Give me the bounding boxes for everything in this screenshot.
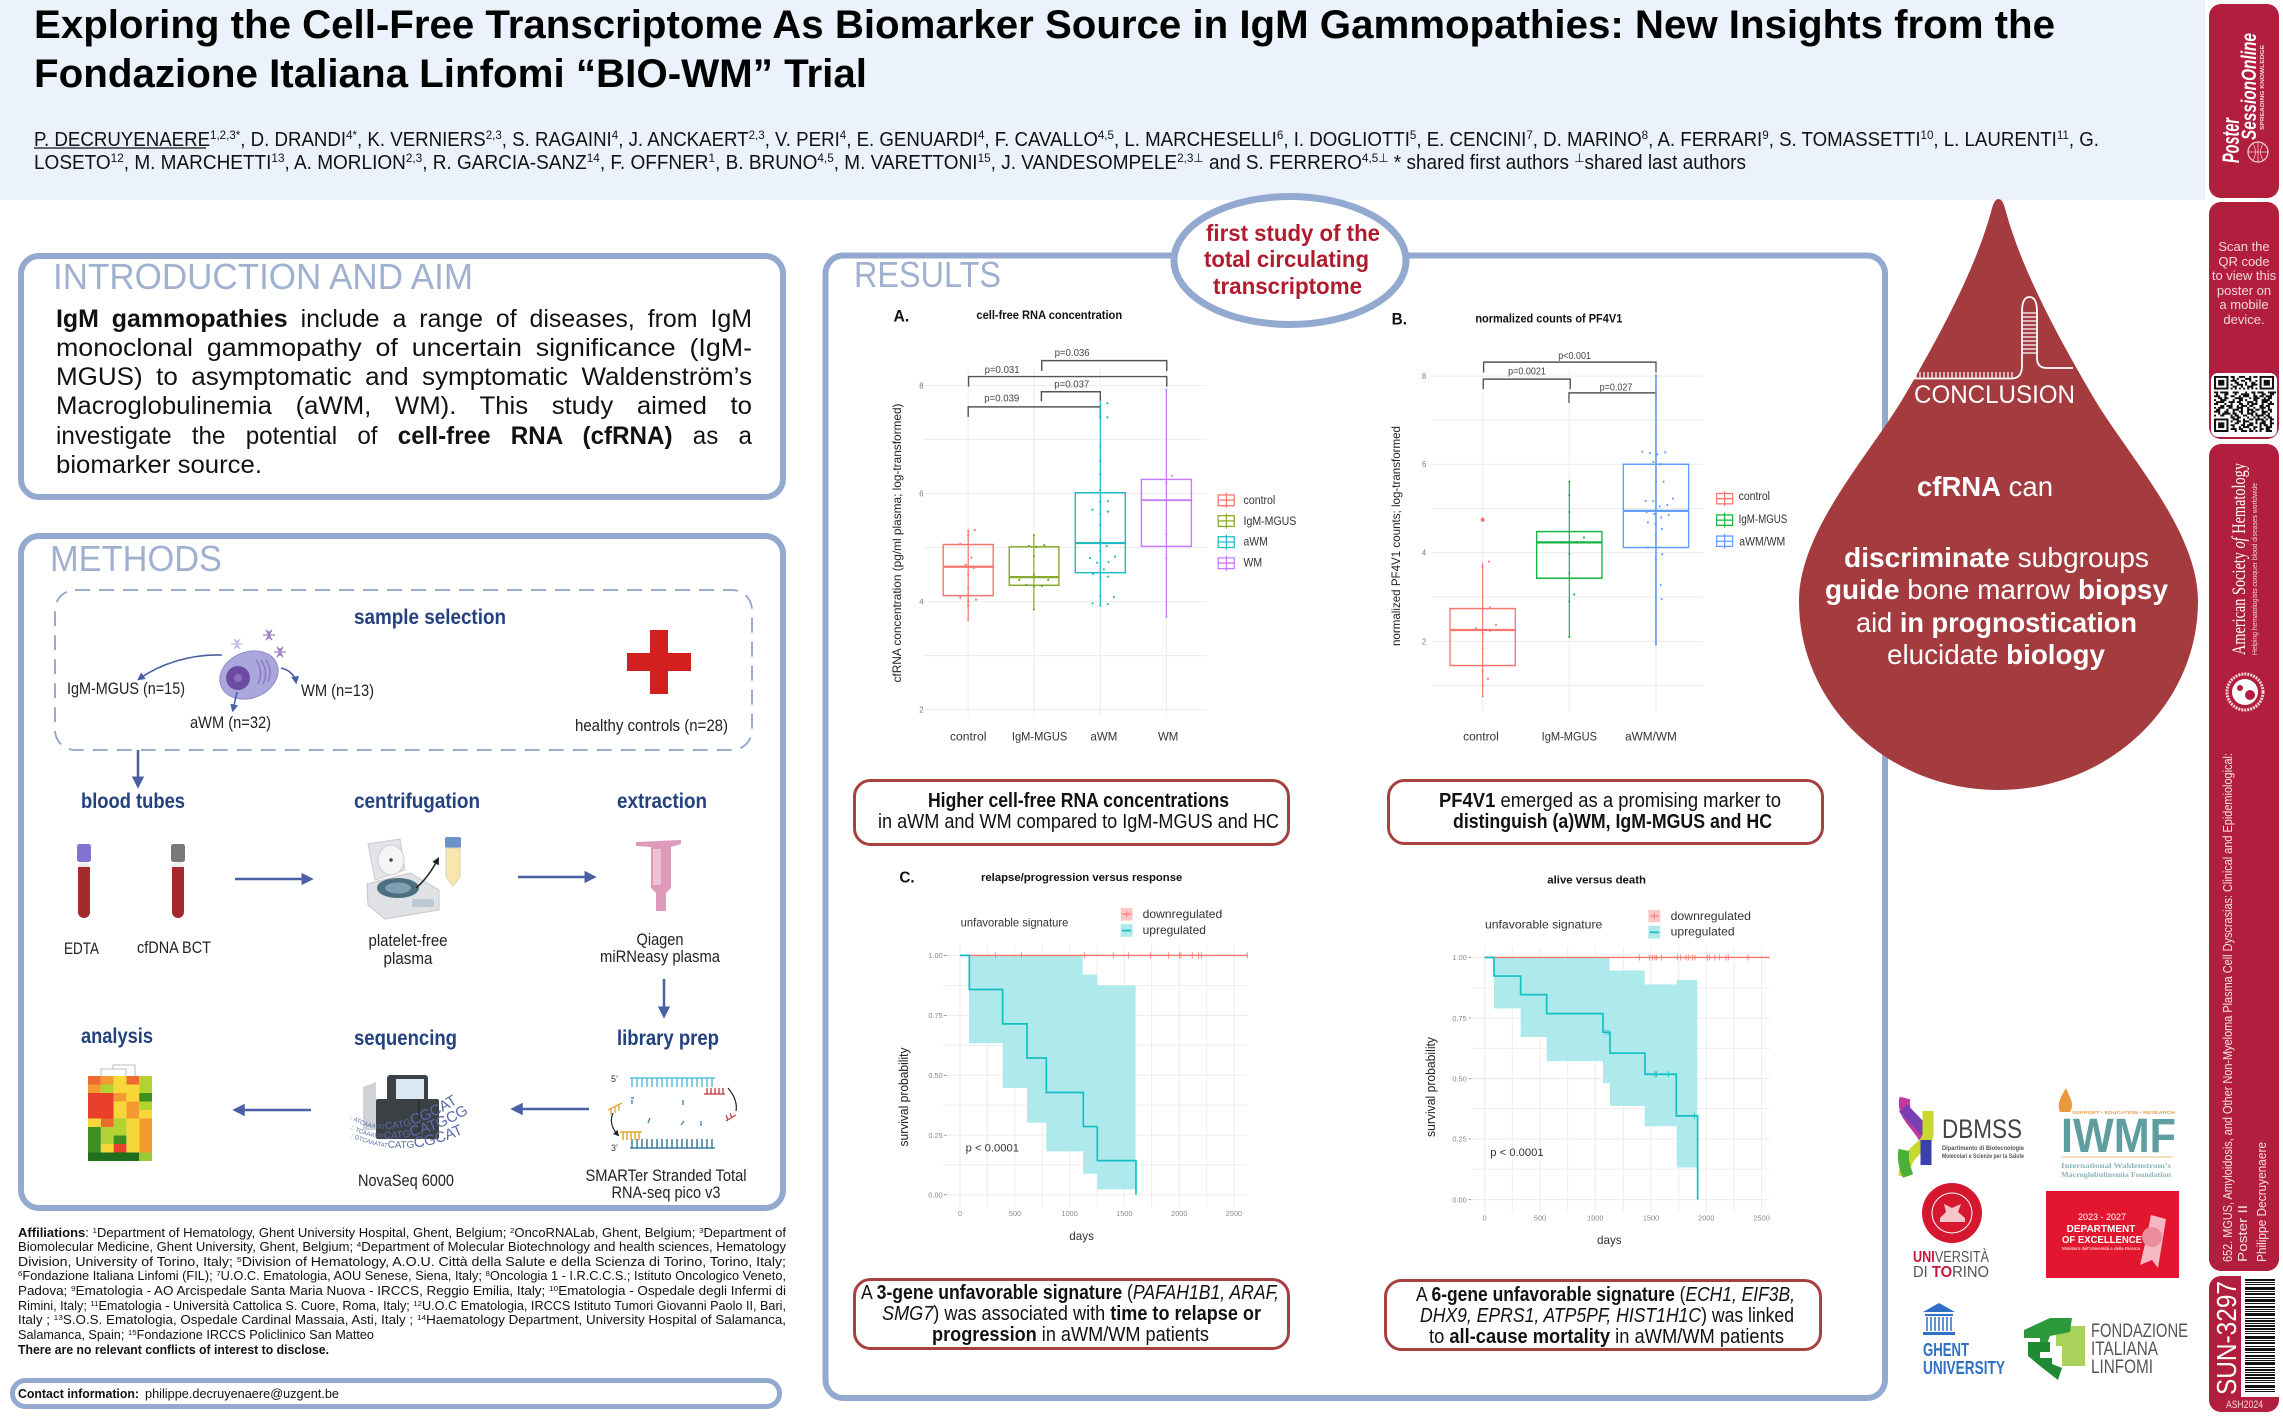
caption D: to all-cause mortality in aWM/WM patients bbox=[1429, 1326, 1784, 1348]
step: analysis heatmap bbox=[81, 1025, 153, 1161]
chart C: relapse/progression versus response: 0.25 bbox=[928, 1131, 943, 1140]
panel: conclusion drop bbox=[1799, 199, 2198, 790]
icon: RNA hairpin bbox=[1914, 297, 2073, 378]
sidebar: abstract number and barcode: SUN-3297 bbox=[2211, 1281, 2242, 1395]
affiliations: Padova; 9Ematologia - AO Arcispedale Santa Maria Nuova - IRCCS, Reggio Emilia, Italy; 10Ematologia - Ospedale degli Infermi di bbox=[18, 1284, 786, 1298]
arrow: extraction to library prep bbox=[663, 979, 665, 1015]
chart A: cell-free RNA concentration: WM bbox=[1244, 556, 1262, 570]
panel: results bbox=[826, 254, 1885, 1398]
arrow: centrifugation to extraction bbox=[518, 876, 593, 878]
chart C: relapse/progression versus response: unfavorable signature bbox=[961, 915, 1069, 930]
chart A: cell-free RNA concentration: aWM bbox=[1244, 534, 1268, 549]
logo: DBMSS: Molecolari e Scienze per la Salute bbox=[1942, 1153, 2024, 1160]
chart C: relapse/progression versus response: 1.00 bbox=[928, 951, 943, 960]
legend B bbox=[1717, 491, 1733, 549]
caption D: DHX9, EPRS1, ATP5PF, HIST1H1C) was linked bbox=[1420, 1305, 1794, 1327]
step: library prep: library prep bbox=[617, 1027, 719, 1050]
logo: department of excellence: OF EXCELLENCE bbox=[2062, 1235, 2142, 1246]
logo: Fondazione Italiana Linfomi: ITALIANA bbox=[2091, 1339, 2158, 1360]
chart C: relapse/progression versus response: p < 0.0001 bbox=[966, 1142, 1019, 1154]
contact information: Contact information: bbox=[18, 1387, 139, 1401]
step: extraction: miRNeasy plasma bbox=[600, 948, 721, 966]
arrows: cell to subgroups bbox=[139, 655, 296, 710]
logo: IWMF bbox=[2059, 1088, 2176, 1179]
chart B: normalized counts of PF4V1: 4 bbox=[1422, 548, 1427, 558]
chart D: alive versus death: 500 bbox=[1534, 1213, 1546, 1223]
chart A: cell-free RNA concentration: p=0.031 bbox=[985, 365, 1020, 376]
sample selection box: aWM (n=32) bbox=[190, 714, 271, 732]
step: extraction bbox=[600, 790, 721, 966]
intro text: monoclonal gammopathy of uncertain significance (IgM- bbox=[56, 334, 752, 362]
caption D: A 6-gene unfavorable signature (ECH1, EIF3B, bbox=[1416, 1284, 1795, 1306]
logo: Ghent University: UNIVERSITY bbox=[1923, 1358, 2005, 1378]
panel: methods bbox=[18, 533, 786, 1211]
logo: department of excellence: 2023 - 2027 bbox=[2078, 1212, 2126, 1222]
chart A: cell-free RNA concentration: 6 bbox=[919, 489, 924, 498]
chart D: alive versus death: survival probability bbox=[1424, 1036, 1438, 1137]
intro text: Macroglobulinemia (aWM, WM). This study aimed to bbox=[56, 392, 752, 420]
logo: DBMSS: DBMSS bbox=[1942, 1114, 2022, 1144]
chart C: relapse/progression versus response: relapse/progression versus response bbox=[981, 872, 1182, 884]
affiliations: Salamanca, Spain; 15Fondazione IRCCS Policlinico San Matteo bbox=[18, 1328, 374, 1342]
chart C: relapse/progression versus response: C. bbox=[899, 870, 915, 887]
sample selection box: WM (n=13) bbox=[301, 682, 374, 700]
chart A: cell-free RNA concentration: p=0.037 bbox=[1054, 380, 1089, 391]
contact information bbox=[12, 1380, 780, 1406]
chart B: normalized counts of PF4V1: control bbox=[1739, 490, 1770, 503]
intro text bbox=[56, 305, 752, 479]
chart B: normalized counts of PF4V1: normalized counts of PF4V1 bbox=[1475, 312, 1623, 326]
legend D: upregulated bbox=[1671, 925, 1735, 939]
icon: ASH seal bbox=[2227, 674, 2263, 710]
legend C: upregulated bbox=[1143, 923, 1206, 937]
arrow: sequencing to analysis bbox=[236, 1109, 311, 1111]
authors: LOSETO12, M. MARCHETTI13, A. MORLION2,3, R. GARCIA-SANZ14, F. OFFNER1, B. BRUNO4,5, M. VARETTONI15, J. VANDESOMPELE2,3⊥ and S. FERRERO4,5⊥ * shared first authors ⊥shared last authors bbox=[34, 151, 1746, 174]
chart B: normalized counts of PF4V1: aWM/WM bbox=[1625, 730, 1677, 744]
step: centrifugation: platelet-free bbox=[368, 932, 448, 950]
chart C: relapse/progression versus response: 0.75 bbox=[928, 1011, 943, 1020]
intro text: investigate the potential of cell-free RNA (cfRNA) as a bbox=[56, 422, 752, 450]
chart B: normalized counts of PF4V1: aWM/WM bbox=[1739, 535, 1785, 549]
step: library prep: 5’ bbox=[611, 1074, 618, 1084]
intro text: IgM gammopathies include a range of diseases, from IgM bbox=[56, 305, 752, 333]
callout: first study of the total circulating transcriptome bbox=[1174, 196, 1406, 324]
affiliations bbox=[18, 1226, 787, 1357]
logo: Università di Torino: DI TORINO bbox=[1913, 1264, 1989, 1281]
step: sequencing: NovaSeq 6000 bbox=[358, 1172, 454, 1190]
chart A: cell-free RNA concentration: control bbox=[950, 729, 986, 744]
chart C: relapse/progression versus response: 1500 bbox=[1116, 1209, 1132, 1218]
legend C bbox=[1121, 907, 1222, 937]
step: sequencing: : GTCAAATATCATGCGCAT bbox=[352, 1124, 460, 1148]
chart C: relapse/progression versus response: 0.50 bbox=[928, 1071, 943, 1080]
step: blood tubes: cfDNA BCT bbox=[137, 939, 211, 957]
step: analysis heatmap: analysis bbox=[81, 1025, 153, 1048]
heading: results: RESULTS bbox=[854, 254, 1001, 295]
chart C: relapse/progression versus response bbox=[897, 870, 1248, 1243]
header band bbox=[0, 0, 2205, 200]
chart A: cell-free RNA concentration: 8 bbox=[919, 381, 924, 390]
logo: DBMSS: Dipartimento di Biotecnologie bbox=[1942, 1145, 2024, 1152]
chart D: alive versus death: 1.00 bbox=[1452, 953, 1467, 962]
chart C: relapse/progression versus response: 1000 bbox=[1062, 1209, 1078, 1218]
title bbox=[34, 3, 2055, 96]
logo: department of excellence bbox=[2046, 1191, 2179, 1278]
chart D: alive versus death: unfavorable signature bbox=[1485, 917, 1603, 932]
chart D: alive versus death: days bbox=[1597, 1233, 1622, 1247]
title: Fondazione Italiana Linfomi “BIO-WM” Trial bbox=[34, 52, 867, 96]
chart D: alive versus death: 0.00 bbox=[1452, 1195, 1467, 1204]
chart B: normalized counts of PF4V1: p=0.027 bbox=[1600, 382, 1632, 394]
sample selection box: IgM-MGUS (n=15) bbox=[67, 680, 185, 698]
chart B: normalized counts of PF4V1: p=0.0021 bbox=[1508, 366, 1546, 378]
chart A: cell-free RNA concentration: WM bbox=[1158, 729, 1178, 744]
chart B: normalized counts of PF4V1: B. bbox=[1392, 310, 1407, 329]
intro text: MGUS) to asymptomatic and symptomatic Waldenström’s bbox=[56, 363, 752, 391]
legend C: downregulated bbox=[1143, 907, 1222, 921]
chart D: alive versus death: 0.75 bbox=[1452, 1014, 1467, 1023]
caption C bbox=[854, 1280, 1288, 1348]
caption A: in aWM and WM compared to IgM-MGUS and HC bbox=[878, 811, 1279, 833]
chart D: alive versus death: 0.50 bbox=[1452, 1074, 1467, 1083]
affiliations: Affiliations: 1Department of Hematology, Ghent University Hospital, Ghent, Belgium; 2OncoRNALab, Ghent, Belgium; 3Department of bbox=[18, 1226, 787, 1240]
step: centrifugation: centrifugation bbox=[354, 790, 480, 813]
logo: Fondazione Italiana Linfomi: FONDAZIONE bbox=[2091, 1321, 2188, 1342]
legend D: downregulated bbox=[1671, 909, 1751, 923]
chart D: alive versus death: 1000 bbox=[1587, 1213, 1603, 1223]
chart A: cell-free RNA concentration: control bbox=[1244, 493, 1275, 507]
sample selection box: healthy controls (n=28) bbox=[575, 717, 728, 735]
caption C: SMG7) was associated with time to relapse or bbox=[882, 1303, 1261, 1325]
chart B: normalized counts of PF4V1: IgM-MGUS bbox=[1542, 730, 1597, 744]
sidebar: QR code panel bbox=[2209, 202, 2279, 439]
chart C: relapse/progression versus response: 2500 bbox=[1226, 1209, 1242, 1218]
affiliations: There are no relevant conflicts of interest to disclose. bbox=[18, 1343, 329, 1357]
chart D: alive versus death: 2500 bbox=[1753, 1213, 1770, 1223]
chart C: relapse/progression versus response: 0 bbox=[958, 1209, 962, 1218]
legend D bbox=[1648, 909, 1751, 939]
chart B: normalized counts of PF4V1: 2 bbox=[1422, 637, 1426, 647]
intro text: biomarker source. bbox=[56, 451, 262, 479]
step: blood tubes: EDTA bbox=[64, 940, 99, 958]
chart B: normalized counts of PF4V1: 8 bbox=[1422, 372, 1426, 381]
chart C: relapse/progression versus response: 0.00 bbox=[928, 1190, 943, 1200]
logo: Ghent University: GHENT bbox=[1923, 1340, 1969, 1360]
logo: DBMSS bbox=[1903, 1098, 2024, 1176]
affiliations: Italy ; 13S.O.S. Ematologia, Ospedale Cardinal Massaia, Asti, Italy ; 14Haematology Department, University Hospital of Salamanca, bbox=[18, 1312, 786, 1327]
sidebar: American Society of Hematology and session details bbox=[2209, 444, 2279, 1271]
chart A: cell-free RNA concentration: cfRNA concentration (pg/ml plasma; log-transformed) bbox=[890, 403, 904, 682]
step: blood tubes: blood tubes bbox=[81, 790, 185, 813]
step: library prep: RNA-seq pico v3 bbox=[612, 1184, 720, 1202]
logo: Fondazione Italiana Linfomi: LINFOMI bbox=[2091, 1357, 2153, 1378]
callout: first study of the total circulating transcriptome: first study of the bbox=[1206, 220, 1380, 246]
chart A: cell-free RNA concentration: IgM-MGUS bbox=[1012, 729, 1067, 744]
panel: introduction and aim bbox=[21, 256, 783, 497]
chart D: alive versus death: 1500 bbox=[1643, 1213, 1659, 1223]
callout: first study of the total circulating transcriptome: transcriptome bbox=[1213, 273, 1362, 299]
sidebar: American Society of Hematology and session details: Poster II bbox=[2235, 1205, 2250, 1262]
chart D: alive versus death: p < 0.0001 bbox=[1490, 1147, 1544, 1159]
conclusion text: elucidate biology bbox=[1887, 639, 2105, 670]
contact information: philippe.decruyenaere@uzgent.be bbox=[145, 1387, 339, 1401]
logo: Fondazione Italiana Linfomi bbox=[2024, 1318, 2188, 1380]
conclusion text: guide bone marrow biopsy bbox=[1825, 574, 2168, 605]
chart B: normalized counts of PF4V1: p<0.001 bbox=[1558, 350, 1591, 362]
caption C: progression in aWM/WM patients bbox=[932, 1324, 1209, 1346]
logo: department of excellence: Ministero dell’Università e della Ricerca bbox=[2062, 1246, 2140, 1252]
conclusion text: discriminate subgroups bbox=[1844, 542, 2149, 573]
chart B: normalized counts of PF4V1 bbox=[1389, 310, 1787, 744]
icon: red cross bbox=[627, 630, 691, 694]
chart C: relapse/progression versus response: days bbox=[1069, 1229, 1094, 1243]
arrow: selection to tubes bbox=[137, 750, 139, 785]
sidebar: American Society of Hematology and session details: Philippe Decruyenaere bbox=[2254, 1142, 2269, 1262]
sidebar: QR code panel: poster on bbox=[2217, 283, 2271, 298]
sidebar: PosterSessionOnline: Poster bbox=[2218, 117, 2245, 163]
caption B bbox=[1388, 780, 1822, 844]
chart D: alive versus death bbox=[1424, 875, 1770, 1247]
authors: P. DECRUYENAERE1,2,3*, D. DRANDI4*, K. VERNIERS2,3, S. RAGAINI4, J. ANCKAERT2,3, V. PERI4, E. GENUARDI4, F. CAVALLO4,5, L. MARCHESELLI6, I. DOGLIOTTI5, E. CENCINI7, D. MARINO8, A. FERRARI9, S. TOMASSETTI10, L. LAURENTI11, G. bbox=[34, 128, 2099, 151]
step: extraction: extraction bbox=[617, 790, 707, 813]
conclusion text: aid in prognostication bbox=[1856, 607, 2137, 638]
logo: department of excellence: DEPARTMENT bbox=[2067, 1224, 2135, 1235]
chart A: cell-free RNA concentration: p=0.039 bbox=[984, 394, 1019, 405]
logo: Ghent University bbox=[1923, 1303, 2005, 1378]
logo: Università di Torino: UNIVERSITÀ bbox=[1913, 1249, 1990, 1266]
sidebar: QR code panel: device. bbox=[2223, 312, 2265, 327]
chart D: alive versus death: 0 bbox=[1483, 1213, 1487, 1223]
affiliations: Division, University of Torino, Italy; 5Division of Hematology, A.O.U. Città della Salute e della Scienza di Torino, Torino, Italy; bbox=[18, 1254, 786, 1269]
logo: IWMF: Macroglobulinemia Foundation bbox=[2061, 1170, 2172, 1179]
logo: IWMF: International Waldenstrom’s bbox=[2061, 1161, 2171, 1170]
arrow: library prep to sequencing bbox=[514, 1108, 589, 1110]
sample selection box: sample selection bbox=[354, 606, 506, 629]
chart C: relapse/progression versus response: 2000 bbox=[1171, 1209, 1187, 1218]
step: library prep: SMARTer Stranded Total bbox=[586, 1167, 746, 1185]
sidebar: American Society of Hematology and session details: Helping hematologists conquer blood diseases worldwide bbox=[2250, 483, 2259, 655]
chart A: cell-free RNA concentration: p=0.036 bbox=[1055, 348, 1090, 359]
step: sequencing bbox=[350, 1027, 468, 1190]
chart D: alive versus death: 0.25 bbox=[1452, 1135, 1467, 1144]
sidebar: American Society of Hematology and session details: 652. MGUS, Amyloidosis, and Other Non-Myeloma Plasma Cell Dyscrasias: Clinical and Epidemiological: bbox=[2220, 753, 2235, 1262]
caption A bbox=[854, 780, 1288, 844]
logo: Università di Torino bbox=[1913, 1183, 1990, 1281]
conclusion text: cfRNA can bbox=[1917, 471, 2053, 502]
sidebar: QR code panel: QR code bbox=[2218, 254, 2270, 269]
heading: methods: METHODS bbox=[50, 538, 222, 579]
sidebar: QR code panel: a mobile bbox=[2219, 297, 2269, 312]
sidebar: QR code panel: to view this bbox=[2212, 268, 2277, 283]
title: Exploring the Cell-Free Transcriptome As Biomarker Source in IgM Gammopathies: New Insights from the bbox=[34, 3, 2055, 47]
sidebar: abstract number and barcode bbox=[2209, 1275, 2279, 1412]
chart A: cell-free RNA concentration: aWM bbox=[1091, 729, 1117, 744]
callout: first study of the total circulating transcriptome: total circulating bbox=[1204, 246, 1369, 272]
caption A: Higher cell-free RNA concentrations bbox=[928, 790, 1229, 812]
authors bbox=[34, 128, 2099, 174]
step: library prep: 3’ bbox=[611, 1143, 618, 1153]
chart A: cell-free RNA concentration: A. bbox=[894, 308, 909, 326]
chart B: normalized counts of PF4V1: control bbox=[1463, 730, 1499, 744]
chart B: normalized counts of PF4V1: IgM-MGUS bbox=[1739, 513, 1787, 526]
sidebar: QR code panel: Scan the bbox=[2218, 239, 2270, 254]
sidebar: PosterSessionOnline: SPREADING KNOWLEDGE bbox=[2260, 45, 2266, 130]
caption D bbox=[1386, 1280, 1820, 1350]
legend A bbox=[1218, 493, 1234, 571]
chart B: normalized counts of PF4V1: 6 bbox=[1422, 460, 1426, 469]
icon: plasma cell bbox=[213, 630, 286, 708]
chart C: relapse/progression versus response: 500 bbox=[1009, 1209, 1021, 1218]
sidebar: American Society of Hematology and session details: American Society of Hematology bbox=[2229, 463, 2250, 655]
step: sequencing: :. ATCAAATATCATGCGCAT bbox=[350, 1094, 455, 1129]
step: sequencing: sequencing bbox=[354, 1027, 457, 1050]
chart A: cell-free RNA concentration: 2 bbox=[919, 705, 924, 715]
sample selection box bbox=[55, 590, 752, 750]
sidebar: abstract number and barcode: ASH2024 bbox=[2226, 1399, 2263, 1411]
step: centrifugation bbox=[354, 790, 480, 968]
logo: IWMF: SUPPORT • EDUCATION • RESEARCH bbox=[2072, 1110, 2175, 1115]
chart A: cell-free RNA concentration: cell-free RNA concentration bbox=[976, 308, 1122, 322]
step: blood tubes bbox=[64, 790, 211, 958]
caption B: distinguish (a)WM, IgM-MGUS and HC bbox=[1453, 811, 1772, 833]
caption C: A 3-gene unfavorable signature (PAFAH1B1, ARAF, bbox=[861, 1282, 1279, 1304]
chart D: alive versus death: alive versus death bbox=[1547, 875, 1646, 887]
heading: introduction and aim: INTRODUCTION AND AIM bbox=[53, 256, 473, 297]
step: centrifugation: plasma bbox=[384, 950, 433, 968]
arrow: tubes to centrifugation bbox=[235, 878, 310, 880]
conclusion text bbox=[1825, 471, 2168, 670]
affiliations: 6Fondazione Italiana Linfomi (FIL); 7U.O.C. Ematologia, AOU Senese, Siena, Italy; 8Oncologia 1 - I.R.C.C.S.; Istituto Oncologico Veneto, bbox=[18, 1268, 786, 1283]
chart D: alive versus death: 2000 bbox=[1698, 1213, 1714, 1223]
caption B: PF4V1 emerged as a promising marker to bbox=[1439, 790, 1781, 812]
chart B: normalized counts of PF4V1: normalized PF4V1 counts; log-transformed bbox=[1389, 426, 1403, 646]
step: sequencing: .:. TCAAATATCATGCATGCG bbox=[350, 1106, 468, 1139]
chart A: cell-free RNA concentration bbox=[890, 308, 1296, 744]
chart C: relapse/progression versus response: survival probability bbox=[897, 1047, 911, 1146]
heading: conclusion: CONCLUSION bbox=[1914, 381, 2075, 409]
chart A: cell-free RNA concentration: IgM-MGUS bbox=[1244, 514, 1296, 528]
affiliations: Biomolecular Medicine, Ghent University, Ghent, Belgium; 4Department of Molecular Biotechnology and health sciences, Hematology bbox=[18, 1240, 787, 1254]
affiliations: Rimini, Italy; 11Ematologia - Università Cattolica S. Cuore, Roma, Italy; 12U.O.C Ematologia, IRCCS Istituto Tumori Giovanni Paolo II, Bari, bbox=[18, 1298, 786, 1313]
step: library prep bbox=[586, 1027, 746, 1202]
chart A: cell-free RNA concentration: 4 bbox=[919, 597, 924, 607]
icon: QR code bbox=[2214, 376, 2276, 432]
step: extraction: Qiagen bbox=[636, 931, 684, 949]
logo: IWMF: IWMF bbox=[2061, 1110, 2176, 1163]
sidebar: PosterSessionOnline bbox=[2209, 4, 2279, 198]
